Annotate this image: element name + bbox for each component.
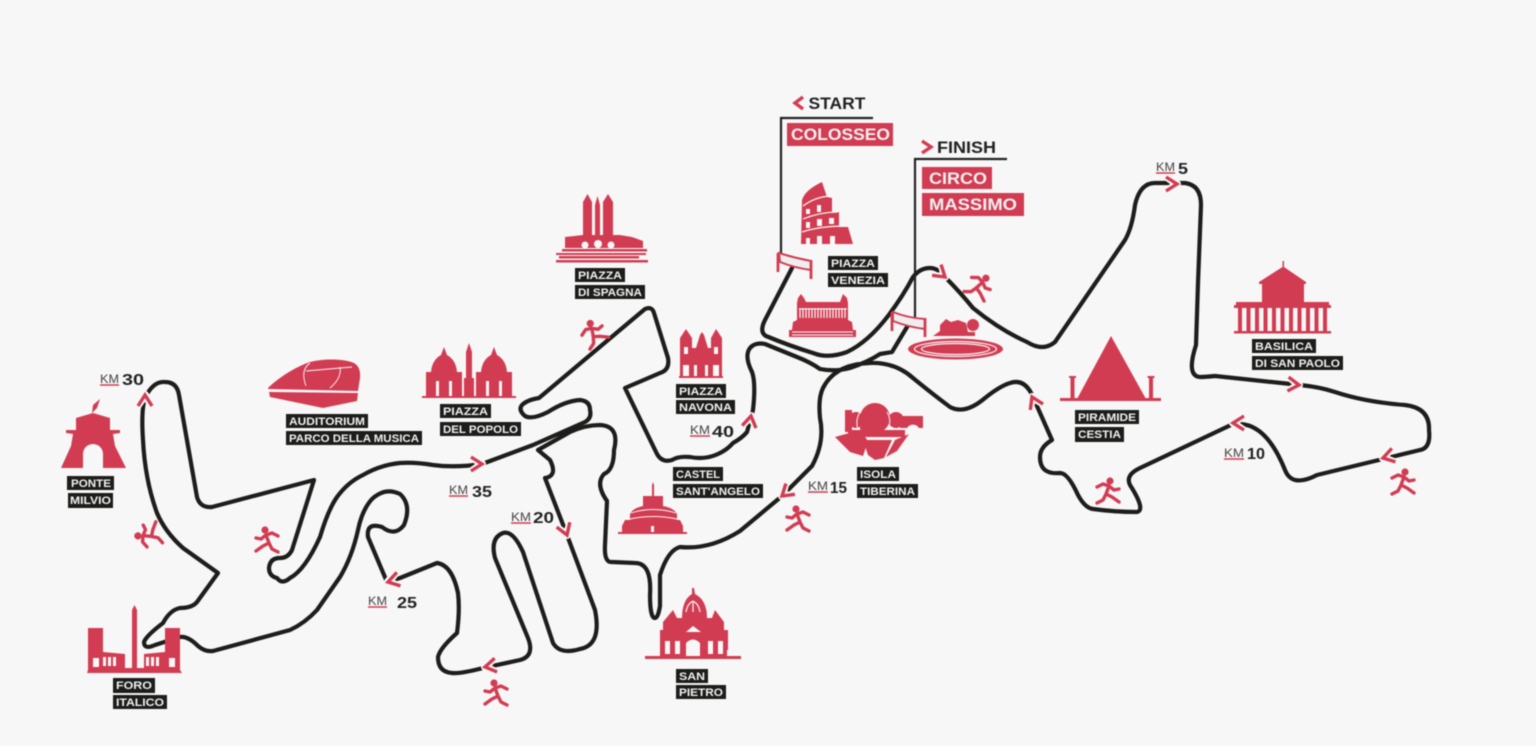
km 30 marker: KM: [100, 372, 119, 386]
runner: [787, 505, 809, 531]
castel sant'angelo label: SANT'ANGELO: [676, 486, 760, 498]
arrow right loop: [1381, 448, 1395, 465]
piazza navona label: NAVONA: [679, 402, 732, 414]
monument: circo massimo: [908, 319, 1003, 360]
km 40 marker: [690, 423, 734, 441]
arrow km35: [471, 457, 482, 471]
km 30 marker: 30: [122, 372, 144, 389]
finish flag: [892, 312, 925, 337]
basilica di san paolo label: BASILICA: [1255, 341, 1313, 353]
monument: piazza navona: [679, 329, 723, 378]
monument: vittoriano: [789, 294, 856, 337]
km 25 marker: 25: [397, 595, 417, 612]
runner: [485, 679, 507, 705]
piramide cestia label: CESTIA: [1078, 429, 1121, 441]
ponte milvio label: MILVIO: [70, 495, 111, 507]
piazza di spagna label: DI SPAGNA: [578, 287, 642, 299]
runner: [1097, 477, 1119, 503]
basilica di san paolo label: DI SAN PAOLO: [1255, 358, 1340, 370]
isola tiberina label: ISOLA: [860, 469, 896, 481]
auditorium label: [286, 414, 422, 445]
runner: [1392, 468, 1414, 494]
arrow lower loop: [484, 658, 497, 674]
runner leaping: [964, 269, 996, 302]
km 10 marker: [1224, 446, 1265, 463]
monument: basilica di san paolo: [1234, 261, 1331, 334]
runner fallen: [132, 522, 162, 549]
castel sant'angelo label: CASTEL: [676, 469, 720, 481]
km 15 marker: 15: [830, 480, 847, 497]
arrow km15: [778, 484, 795, 501]
arrow km5: [1166, 177, 1177, 191]
km 30 marker: [100, 372, 144, 389]
km 25 marker: [368, 594, 417, 612]
auditorium label: PARCO DELLA MUSICA: [289, 433, 419, 445]
start place label: COLOSSEO: [791, 125, 890, 144]
finish place label: [922, 167, 1024, 216]
piazza venezia label: PIAZZA: [831, 258, 875, 270]
piramide cestia label: [1075, 410, 1139, 442]
arrow after finish: [932, 265, 949, 282]
km 10 marker: KM: [1224, 446, 1244, 460]
monument: piazza del popolo: [422, 343, 516, 398]
monument: san pietro: [645, 588, 741, 659]
km 5 marker: [1156, 160, 1188, 178]
piazza venezia label: [828, 256, 888, 287]
finish place label: MASSIMO: [929, 195, 1017, 214]
piazza del popolo label: PIAZZA: [443, 406, 488, 418]
san pietro label: [676, 669, 726, 699]
start flag: [778, 253, 811, 279]
runner kicking: [577, 316, 609, 349]
arrow basilica: [1287, 377, 1300, 392]
finish place label: CIRCO: [929, 169, 987, 188]
km 5 marker: 5: [1178, 161, 1188, 178]
runner: [256, 526, 278, 552]
castel sant'angelo label: [673, 467, 763, 498]
monument: castel sant'angelo: [618, 482, 687, 534]
km 40 marker: 40: [712, 424, 734, 441]
monument: piazza di spagna: [556, 194, 648, 262]
basilica di san paolo label: [1252, 339, 1343, 370]
piazza di spagna label: [575, 268, 645, 299]
foro italico label: FORO: [116, 680, 152, 692]
km 20 marker: KM: [511, 510, 531, 524]
km 35 marker: [449, 483, 492, 501]
arrow piramide: [1026, 394, 1043, 410]
km 20 marker: 20: [533, 510, 554, 527]
monument: ponte milvio: [61, 399, 126, 468]
finish pointer line: [915, 159, 1007, 317]
monument: isola tiberina: [835, 403, 923, 460]
piazza del popolo label: DEL POPOLO: [443, 424, 518, 436]
km 40 marker: KM: [690, 423, 710, 437]
monument: foro italico: [87, 605, 182, 673]
piazza venezia label: VENEZIA: [831, 275, 885, 287]
monument: auditorium: [268, 359, 360, 408]
monument: piramide cestia: [1060, 336, 1161, 401]
km 20 marker: [511, 510, 554, 527]
km 5 marker: KM: [1156, 160, 1175, 174]
ponte milvio label: [67, 476, 114, 508]
foro italico label: [113, 678, 167, 709]
route track: [142, 183, 1429, 673]
arrow km25: [386, 572, 400, 589]
isola tiberina label: [857, 467, 918, 498]
piramide cestia label: PIRAMIDE: [1078, 412, 1136, 424]
isola tiberina label: TIBERINA: [860, 486, 915, 498]
piazza di spagna label: PIAZZA: [578, 270, 622, 282]
san pietro label: SAN: [679, 671, 705, 683]
km 15 marker: KM: [808, 479, 828, 493]
km 10 marker: 10: [1247, 446, 1265, 463]
piazza navona label: [676, 384, 735, 414]
san pietro label: PIETRO: [679, 687, 723, 699]
arrow km30: [138, 395, 152, 406]
piazza navona label: PIAZZA: [679, 386, 723, 398]
finish heading: FINISH: [937, 139, 996, 157]
arrow km20: [557, 522, 574, 537]
monument: colosseo: [801, 182, 853, 244]
arrow km10: [1233, 416, 1244, 430]
foro italico label: ITALICO: [116, 697, 164, 709]
km 35 marker: 35: [472, 484, 492, 501]
km 35 marker: KM: [449, 483, 468, 497]
start heading: START: [808, 95, 866, 113]
start pointer line: [781, 118, 873, 253]
arrow km40: [742, 415, 758, 428]
km 25 marker: KM: [368, 594, 387, 608]
km 15 marker: [808, 479, 847, 497]
piazza del popolo label: [440, 404, 521, 436]
auditorium label: AUDITORIUM: [289, 416, 365, 428]
ponte milvio label: PONTE: [71, 478, 111, 490]
